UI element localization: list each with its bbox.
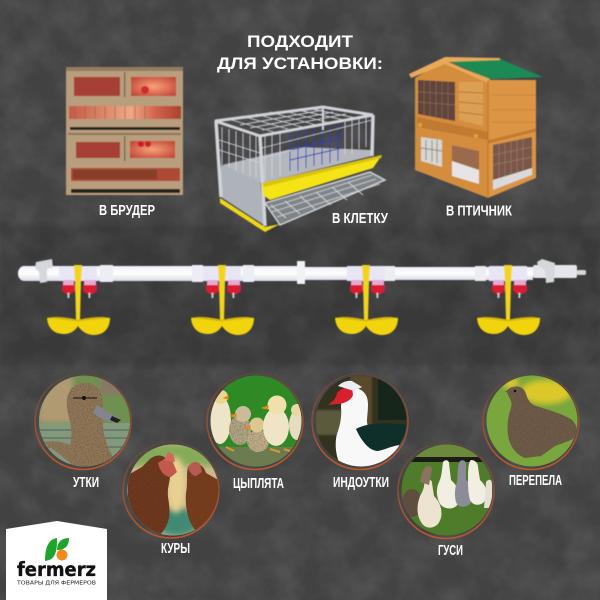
photo circle: quail — [483, 374, 579, 470]
illustration: brooder — [66, 67, 183, 195]
logo tagline: ТОВАРЫ ДЛЯ ФЕРМЕРОВ — [16, 580, 97, 586]
logo icon — [45, 538, 69, 561]
drinker 3 — [335, 265, 398, 335]
drinker 1 — [47, 265, 110, 335]
photo circle: duck — [35, 374, 132, 472]
logo wordmark: fermerz — [17, 558, 96, 581]
label: geese: ГУСИ — [438, 543, 463, 559]
photo circle: hens — [123, 442, 220, 538]
label: quail: ПЕРЕПЕЛА — [509, 473, 562, 489]
photo circle: chicks — [207, 374, 305, 470]
illustration: cage — [215, 107, 385, 232]
logo: fermerz — [6, 521, 107, 600]
label: hens: КУРЫ — [161, 541, 190, 557]
drinker 2 — [191, 265, 254, 335]
drinker 4 — [477, 265, 540, 335]
title — [217, 33, 383, 73]
illustration: hutch — [409, 57, 543, 198]
photo circle: geese — [398, 442, 494, 538]
pipe — [18, 259, 586, 284]
label: cage: В КЛЕТКУ — [332, 211, 389, 227]
label: hutch: В ПТИЧНИК — [446, 204, 512, 220]
drinking line: pipe with cups — [18, 259, 586, 335]
title: ДЛЯ УСТАНОВКИ: — [217, 55, 383, 73]
photo circle: muscovy ducks — [312, 374, 408, 470]
label: ducks: УТКИ — [73, 475, 99, 491]
label: brooder: В БРУДЕР — [99, 203, 155, 219]
label: muscovy ducks: ИНДОУТКИ — [333, 475, 389, 491]
label: chicks: ЦЫПЛЯТА — [233, 476, 284, 492]
title: ПОДХОДИТ — [247, 33, 353, 51]
